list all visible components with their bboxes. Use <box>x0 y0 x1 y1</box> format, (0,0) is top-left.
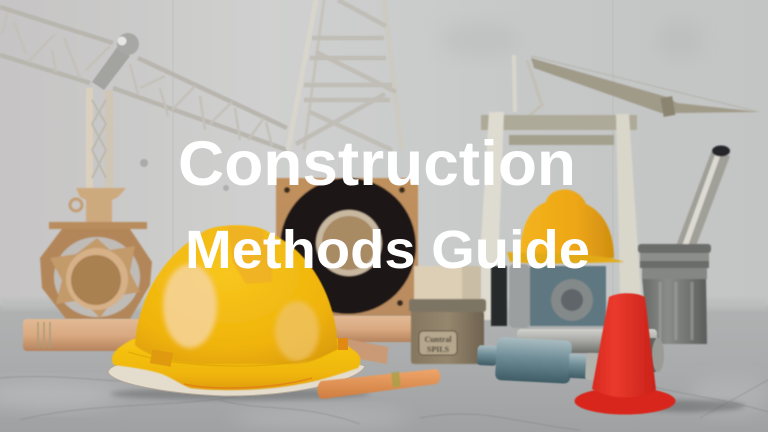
orange chalk stick <box>317 369 440 399</box>
left crane <box>0 7 287 190</box>
hard hat: mat <box>108 358 365 396</box>
hard hat: dome <box>135 225 338 364</box>
labelled tin <box>409 266 486 364</box>
center tower <box>288 0 402 150</box>
title line 2: Methods Guide <box>185 220 590 280</box>
hard hat: brim <box>112 338 360 390</box>
title <box>178 129 590 280</box>
front hard hat <box>108 225 365 396</box>
labelled tin: SPILS <box>427 345 450 354</box>
ground shadow under helmet <box>110 388 370 400</box>
title line 1: Construction <box>178 129 576 199</box>
crane pivot <box>92 46 130 90</box>
metal pipe fittings <box>476 329 664 385</box>
wooden speaker box <box>276 178 418 316</box>
metal bucket <box>638 146 730 344</box>
background: concrete wall <box>0 0 768 310</box>
labelled tin: Cuntral <box>424 335 452 344</box>
crane mast <box>86 88 93 190</box>
paper rolls <box>23 316 414 364</box>
background: concrete floor <box>0 299 768 432</box>
rear scaffold frame and right crane <box>476 55 759 320</box>
red traffic cone <box>574 293 745 414</box>
rear hard hat on pipe fitting <box>491 190 624 328</box>
wooden gear ornament <box>40 188 152 319</box>
